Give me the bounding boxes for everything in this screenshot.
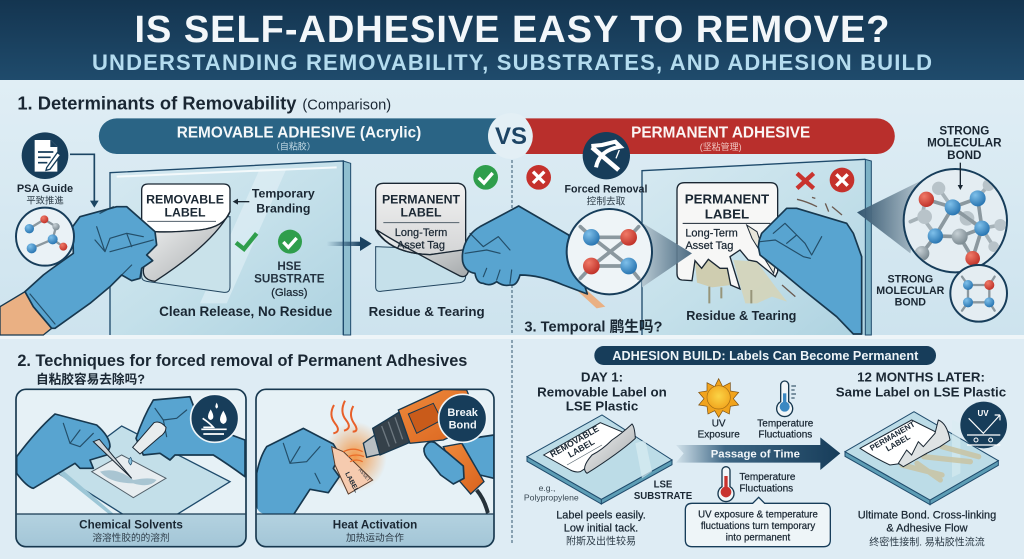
cone: strong bond zoom [857,179,924,253]
label: substrate type: Polypropylene [524,493,579,503]
arrow: passage of time [676,437,840,470]
heading: day 1: DAY 1: [581,369,623,384]
icon: UV cross-linking: UV [977,409,989,418]
icon: green checks [236,230,302,254]
banner: removable adhesive [99,118,500,154]
label: strong molecular bond top: BOND [947,149,981,162]
cone: molecule zoom [640,222,692,287]
permanent label torn: Asset Tag [685,240,733,252]
panel: forced removal techniques [16,352,494,547]
text: ultimate bond: 终密性接制. 易粘胶性流流 [869,535,985,548]
permanent label torn [677,183,778,289]
card: heat activation: ASSET [358,467,371,482]
icon: red cross [526,165,551,190]
icon: PSA guide document [17,132,73,206]
text: clean release: Clean Release, No Residue [159,304,333,319]
heading: determinants of removability: 1. Determinants of Removability(Comparison) [17,92,391,113]
permanent label torn: PERMANENT [685,191,769,206]
icon: thermometer blue: Fluctuations [758,430,812,441]
label: substrate type: LSE [654,480,673,491]
text: residue and tearing: Residue & Tearing [369,304,485,319]
pill heading: ADHESION BUILD: Labels Can Become Permanent [612,349,919,363]
glass substrate panel [110,161,351,335]
callout: UV and temperature: into permanent [726,532,791,543]
label: strong molecular bond bottom: STRONG [888,274,933,286]
label: substrate type: SUBSTRATE [634,491,693,502]
residue label [92,455,166,498]
icon: thermometer blue [757,381,814,441]
icon: PSA guide document: PSA Guide [17,183,73,195]
label: strong molecular bond bottom: BOND [895,297,926,309]
banner: removable adhesive: REMOVABLE ADHESIVE (Acrylic) [177,124,421,141]
callout: UV and temperature: UV exposure & temperature [698,509,818,520]
permanent label peeling: PERMANENT [382,192,460,206]
tear flecks [797,197,842,215]
label: strong molecular bond bottom [876,274,945,309]
icon: forced removal: Forced Removal [565,184,647,196]
callout: UV and temperature [685,497,830,547]
glass panel: permanent [642,159,871,335]
glove hand pulling permanent label [462,206,605,308]
heat glow [329,424,385,490]
icon: forced removal: 控制去取 [587,195,626,207]
label: strong molecular bond bottom: MOLECULAR [876,285,945,297]
icon: sun UV exposure: UV [712,419,726,430]
heading: day 1 [537,369,667,414]
icon: red cross marks [797,168,854,192]
banner: permanent adhesive: (坚粘管理) [700,141,742,152]
arrow: passage of time: Passage of Time [711,449,800,461]
gun cord [477,490,488,515]
VS badge: VS [495,123,527,150]
banner: permanent adhesive: PERMANENT ADHESIVE [631,124,810,141]
text: residue and tearing: Residue & Tearing [686,309,796,323]
card: chemical solvents: Chemical Solvents [79,518,183,531]
heading: 12 months later [836,369,1007,399]
glove hand holding removable label [0,207,157,335]
permanent label torn: LABEL [705,206,749,221]
icon: sun UV exposure: Exposure [698,430,740,441]
text: ultimate bond: Ultimate Bond. Cross-linking [858,510,996,522]
permanent label peeling [376,183,468,291]
permanent label peeling: LABEL [400,206,442,220]
heading: techniques: 自粘胶容易去除吗? [36,371,145,386]
gun handle [443,443,484,494]
removable label peeling: REMOVABLE [146,192,224,206]
banner: removable adhesive: （自粘胶） [271,141,316,152]
card: heat activation [256,389,494,547]
panel: removable adhesive side [0,92,605,335]
heading: techniques [17,352,467,386]
text: label peels easily: 附斯及出性较易 [566,535,636,548]
glove palm behind handle [460,435,494,478]
subtitle: UNDERSTANDING REMOVABILITY, SUBSTRATES, AND ADHESION BUILD [92,50,932,75]
dashed section divider [511,160,513,545]
panel: adhesion build [524,346,1007,548]
icon: UV cross-linking [960,402,1007,448]
glove hand tearing label [758,208,862,334]
VS badge [488,113,534,159]
illustration: removable label on plastic [527,415,672,504]
callout: temporary branding: Temporary [252,187,315,201]
label: substrate type: e.g., [539,483,555,493]
heading: 12 months later: 12 MONTHS LATER: [857,369,985,384]
icon: thermometer red: Temperature [739,472,796,483]
left glove [257,428,340,515]
badge: break bond [439,394,487,442]
illustration: removable label on plastic: REMOVABLE [548,423,601,459]
removable label peeling [142,184,230,292]
label: substrate type [524,480,693,503]
residue left on glass [695,259,795,303]
card: heat activation: Break [447,407,479,419]
removable label peeling: LABEL [164,206,206,220]
glass plate [58,426,230,517]
heat waves [331,401,357,433]
pill heading [594,346,936,365]
card: heat activation: Bond [449,419,477,431]
title: IS SELF-ADHESIVE EASY TO REMOVE? [134,9,890,51]
label: strong molecular bond top: MOLECULAR [927,137,1002,150]
text: ultimate bond [858,510,996,548]
icon: solvent drops [191,394,239,442]
card: heat activation: Heat Activation [333,518,417,531]
left glove with tweezers [17,414,110,488]
illustration: removable label on plastic: LABEL [566,436,597,460]
banner: permanent adhesive [525,118,895,154]
heated label [332,447,373,494]
illustration: permanent label on plastic [845,412,998,505]
right glove with dropper [136,397,245,477]
label: strong molecular bond top [927,124,1002,190]
permanent label torn: Long-Term [685,228,738,240]
icon: molecule circle [16,208,74,266]
text: HSE substrate: SUBSTRATE [254,273,325,286]
heading: techniques: 2. Techniques for forced removal of Permanent Adhesives [17,352,467,370]
text: label peels easily: Label peels easily. [556,510,646,522]
panel: permanent adhesive side [524,118,1007,336]
text: label peels easily: Low initial tack. [564,523,638,535]
card: heat activation: 加热运动合作 [346,532,404,544]
molecule circle: bond close-up [567,209,652,294]
icon: green check [473,165,498,190]
text: HSE substrate: HSE [277,260,302,273]
section heading: temporal: 3. Temporal 鹛生吗? [524,319,663,336]
label: strong molecular bond top: STRONG [939,124,989,137]
title banner [0,0,1024,80]
icon: sun UV exposure [698,379,740,441]
illustration: permanent label on plastic: PERMANENT [868,420,917,453]
glove fingers in front of handle [424,442,464,484]
heat gun [363,435,383,457]
permanent label peeling: Long-Term [395,227,447,239]
card: chemical solvents [16,389,246,547]
text: HSE substrate: (Glass) [271,287,308,299]
icon: PSA guide document: 平致推進 [26,195,64,206]
heading: day 1: LSE Plastic [566,399,639,414]
text: label peels easily [556,510,646,548]
card: chemical solvents: 溶溶性胶的的溶剂 [92,532,170,544]
illustration: permanent label on plastic: LABEL [884,432,912,453]
icon: thermometer red: Fluctuations [739,483,793,494]
icon: forced removal [565,132,647,207]
callout: UV and temperature: fluctuations turn temporary [701,521,815,532]
icon: thermometer red [718,467,796,502]
text: ultimate bond: & Adhesive Flow [886,523,968,535]
callout: temporary branding [233,187,315,215]
permanent label peeling: Asset Tag [397,239,445,251]
text: HSE substrate [254,260,325,299]
arrow: to permanent label [327,237,372,251]
heading: 12 months later: Same Label on LSE Plastic [836,384,1007,399]
molecule circle: small [950,265,1007,322]
icon: thermometer blue: Temperature [757,419,814,430]
heading: day 1: Removable Label on [537,384,667,399]
card: heat activation: LABEL [343,471,360,494]
molecule circle: strong molecular bond [904,169,1007,272]
callout: temporary branding: Branding [256,201,310,215]
arrow: PSA guide to glove [70,154,94,202]
